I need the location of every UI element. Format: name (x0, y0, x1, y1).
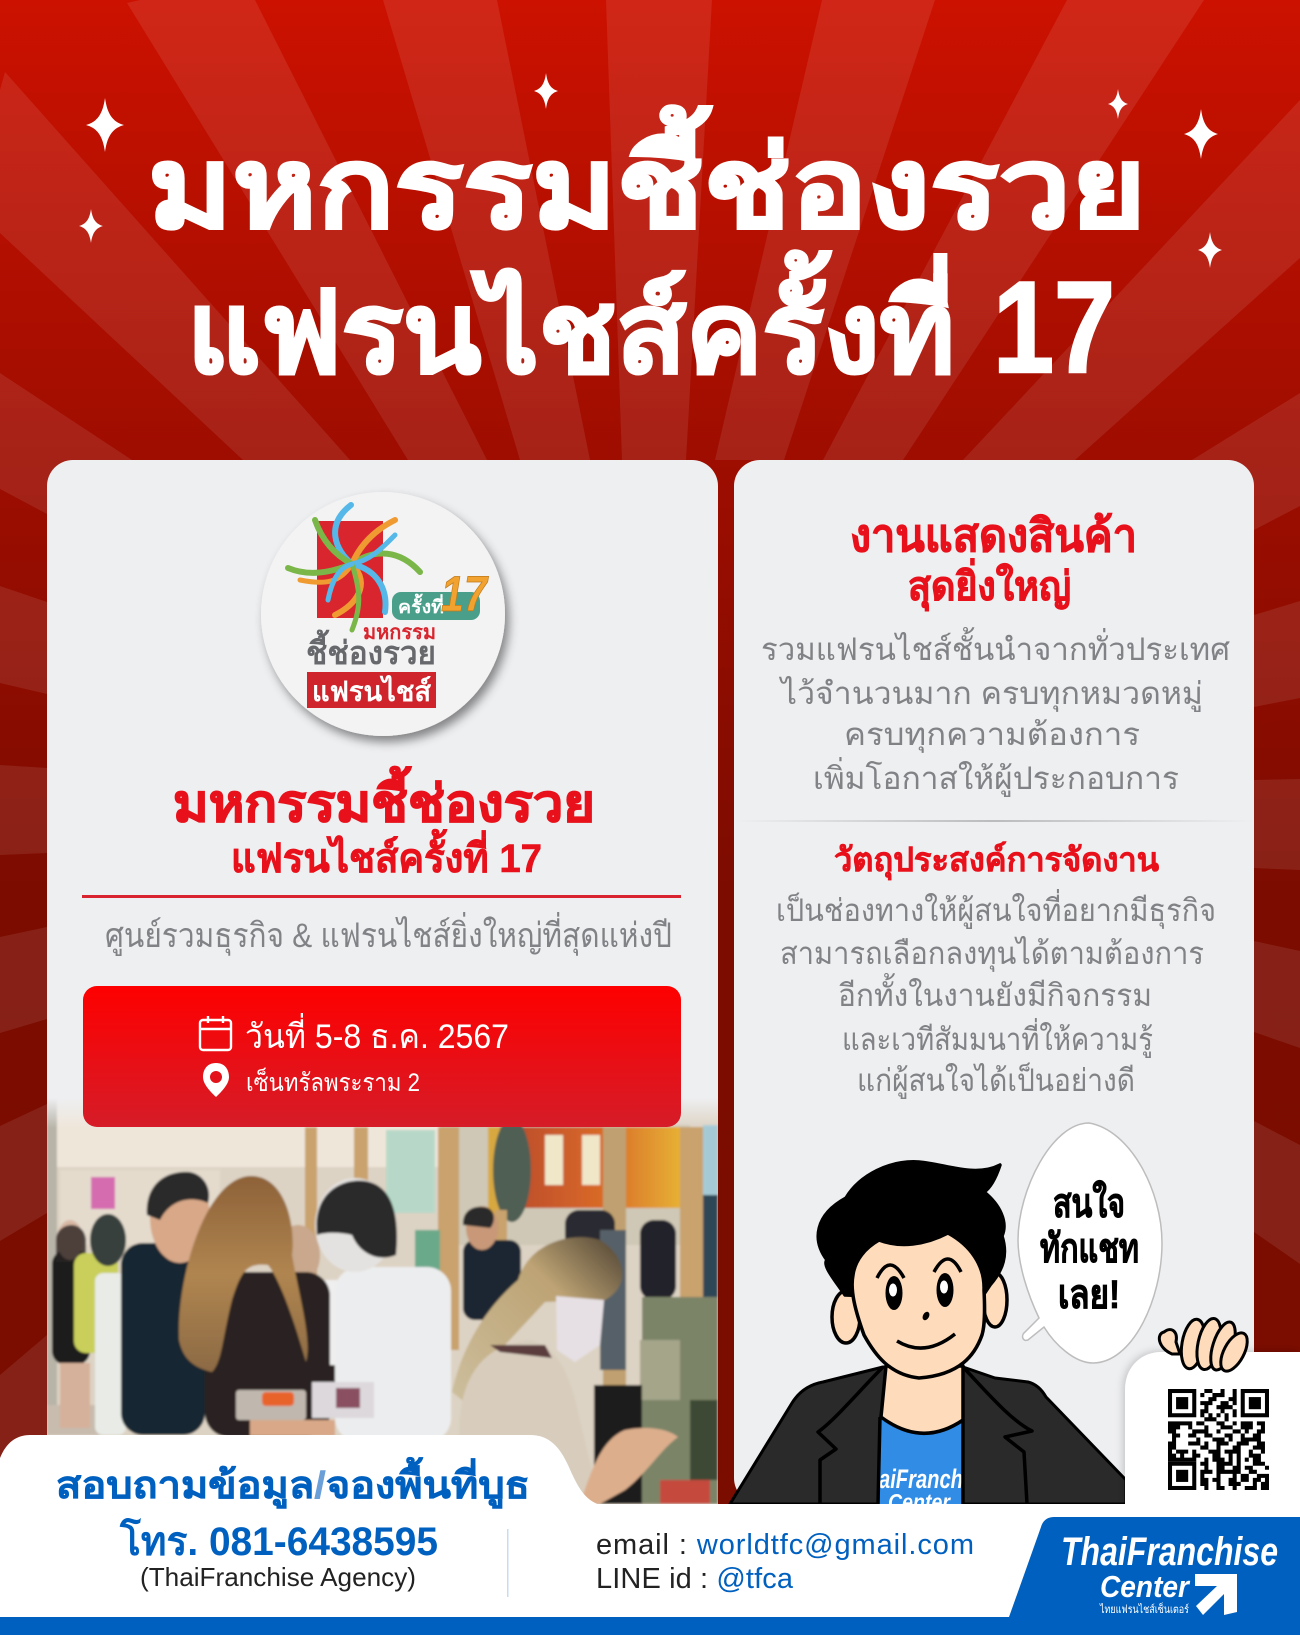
logo wordmark: แฟรนไชส์ (312, 675, 432, 707)
nose (922, 1312, 930, 1320)
main title: มหกรรมชี้ช่องรวย (148, 105, 1146, 251)
hair (818, 1162, 1005, 1300)
logo teal pill (392, 592, 480, 620)
bubble text: ทักแชท (1040, 1227, 1139, 1271)
card title: แฟรนไชส์ครั้งที่ 17 (231, 829, 542, 881)
t-shirt (879, 1415, 963, 1504)
older woman white (323, 1279, 338, 1367)
face (852, 1233, 985, 1378)
bottom contact band (0, 1435, 1300, 1635)
heading: trade show (850, 510, 1137, 612)
mouth (897, 1334, 955, 1348)
text block: objectives: อีกทั้งในงานยังมีกิจกรรม (838, 973, 1152, 1013)
jacket (730, 1367, 1126, 1504)
ears (832, 1291, 860, 1343)
man white shirt (335, 1267, 451, 1442)
lapels (818, 1367, 1032, 1504)
line id: LINE id : @tfca (596, 1563, 794, 1595)
text block: objectives (776, 889, 1216, 1099)
eyebrows (877, 1259, 961, 1278)
text block: objectives: สามารถเลือกลงทุนได้ตามต้องการ (780, 936, 1204, 973)
text block: trade show description (761, 627, 1230, 797)
logo number 17: 17 (441, 566, 489, 622)
icon: arrow (1195, 1574, 1237, 1615)
logo badge: ครั้งที่ (398, 593, 444, 617)
logo swirl (288, 505, 420, 630)
text block: trade show description: รวมแฟรนไชส์ชั้นนำจากทั่วประเทศ (761, 627, 1230, 667)
main title: แฟรนไชส์ครั้งที่ (187, 250, 955, 396)
bubble text: เลย! (1058, 1273, 1120, 1317)
man in dark tee (121, 1243, 205, 1435)
QR panel (1125, 1316, 1300, 1505)
logo wordmark: มหกรรม (363, 622, 436, 644)
inquiry heading: สอบถามข้อมูล /จองพื้นที่บูธ (56, 1457, 530, 1509)
glass case (642, 1297, 718, 1504)
main title (148, 105, 1146, 400)
date text: วันที่ 5-8 ธ.ค. 2567 (245, 1013, 509, 1056)
text block: objectives: และเวทีสัมมนาที่ให้ความรู้ (842, 1018, 1153, 1058)
date and venue box (83, 986, 681, 1127)
t-shirt print (880, 1468, 962, 1504)
logo wordmark (306, 622, 436, 708)
cartoon mascot (730, 1162, 1126, 1515)
icon: hand holding panel (1159, 1316, 1253, 1375)
bubble text: สนใจ (1053, 1180, 1125, 1226)
text block: trade show description: เพิ่มโอกาสให้ผู้ประกอบการ (813, 757, 1179, 797)
email: email : worldtfc@gmail.com (596, 1529, 974, 1561)
logo red square (317, 521, 383, 618)
brand logo: Center (1100, 1569, 1191, 1604)
neck (881, 1366, 963, 1433)
event photo (40, 1085, 730, 1515)
eyes (886, 1276, 902, 1310)
brand logo (1009, 1517, 1300, 1635)
logo wordmark: ชี้ช่องรวย (306, 629, 436, 671)
panel: right info card (734, 460, 1254, 1504)
agency name: (ThaiFranchise Agency) (140, 1562, 416, 1592)
lace body (205, 1272, 330, 1437)
left woman (52, 1250, 90, 1365)
t-shirt print: Center (888, 1489, 951, 1515)
venue text: เซ็นทรัลพระราม 2 (246, 1067, 420, 1097)
phone number: โทร. 081-6438595 (119, 1518, 438, 1564)
bubble text (1040, 1180, 1139, 1317)
heading: trade show: สุดยิ่งใหญ่ (908, 558, 1071, 612)
QR code (1168, 1391, 1269, 1488)
logo badge (261, 492, 505, 736)
heading: trade show: งานแสดงสินค้า (850, 510, 1137, 561)
footer bar (0, 1617, 1300, 1635)
long hair (179, 1176, 308, 1372)
text block: objectives: แก่ผู้สนใจได้เป็นอย่างดี (857, 1062, 1135, 1099)
text block: trade show description: ครบทุกความต้องการ (844, 717, 1140, 754)
icon: map pin (203, 1063, 229, 1097)
text block: trade show description: ไว้จำนวนมาก ครบทุกหมวดหมู่ (778, 676, 1203, 713)
card title: มหกรรมชี้ช่องรวย (173, 766, 595, 832)
speech bubble (1018, 1123, 1162, 1363)
sparkle stars (79, 73, 1222, 268)
tagline: ศูนย์รวมธุรกิจ & แฟรนไชส์ยิ่งใหญ่ที่สุดแห่งปี (105, 912, 672, 956)
main title: 17 (993, 254, 1115, 400)
brand logo: ไทยแฟรนไชส์เซ็นเตอร์ (1099, 1602, 1189, 1616)
heading: objectives: วัตถุประสงค์การจัดงาน (834, 841, 1159, 881)
panel: left event card (40, 460, 730, 1515)
card title (173, 766, 595, 881)
icon: calendar (200, 1016, 231, 1050)
blonde woman (452, 1237, 622, 1405)
text block: objectives: เป็นช่องทางให้ผู้สนใจที่อยากมีธุรกิจ (776, 889, 1216, 930)
t-shirt print: aiFranch (879, 1464, 963, 1494)
